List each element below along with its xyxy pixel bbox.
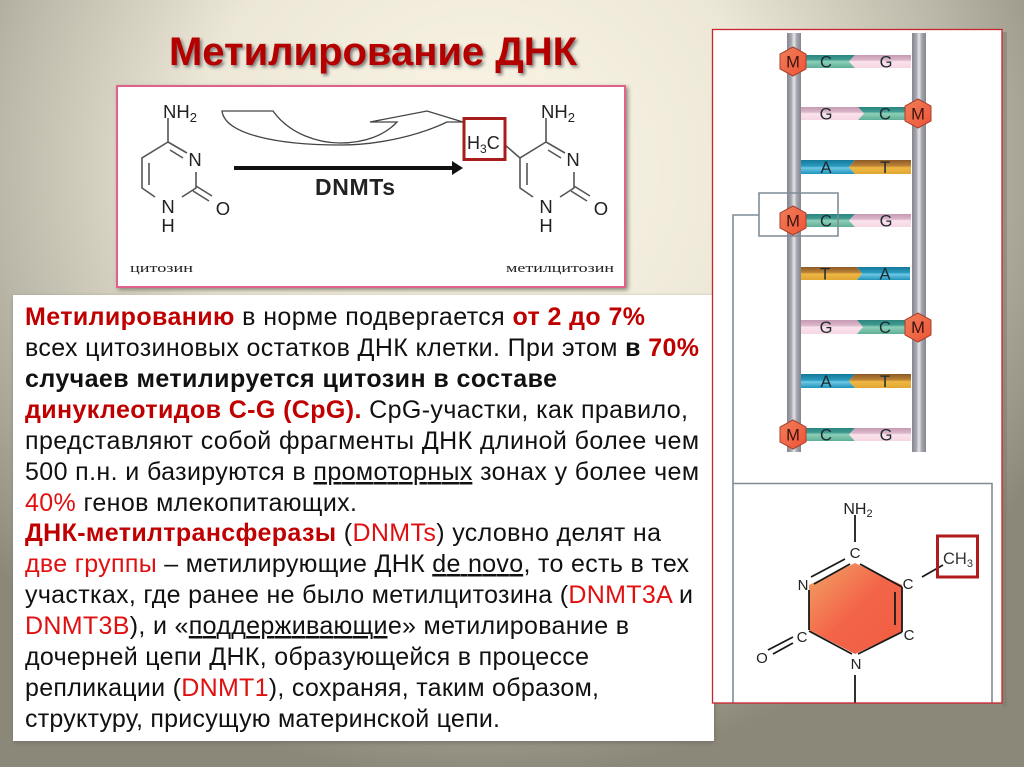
rung 7: A T: A [820, 373, 832, 391]
molecule: methylcytosine detail: N [851, 656, 861, 673]
rung 1: M C G: G [880, 54, 892, 72]
molecule: methylcytosine detail [756, 501, 978, 703]
molecule: methylcytosine: NH [541, 101, 568, 122]
callout: highlight box and leader [733, 193, 992, 703]
ring [809, 563, 902, 654]
rail: left strand [787, 33, 801, 452]
rung 2: G C M: M [911, 106, 925, 124]
rung 5: T A: A [879, 266, 891, 284]
text line 1: Метилированию в норме подвергается от 2 до 7% [25, 303, 645, 331]
molecule: methylcytosine detail: NH [843, 501, 866, 518]
CH3 in red box: 3 [967, 558, 973, 570]
molecule: methylcytosine: O [594, 198, 608, 219]
rung 2: G C M: G [820, 106, 832, 124]
text line 12: дочерней цепи ДНК, образующейся в процессе [25, 643, 589, 671]
molecule: methylcytosine: H [539, 215, 553, 236]
rung 3: A T: A [820, 159, 832, 177]
text line 13: репликации (DNMT1), сохраняя, таким образом, [25, 674, 599, 702]
rung 6: G C M [801, 313, 931, 342]
molecule: methylcytosine: 2 [568, 110, 575, 125]
rung 8: M C G: M [786, 426, 800, 444]
molecule: cytosine: NH [163, 101, 190, 122]
rung 4: M C G [780, 206, 911, 235]
text line 11: DNMT3B), и «поддерживающие» метилирование в [25, 612, 629, 640]
rung 5: T A [801, 266, 910, 284]
text line 5: представляют собой фрагменты ДНК длиной более чем [25, 427, 699, 455]
arrow: methyl transfer curve [222, 111, 463, 145]
molecule: methylcytosine detail: C [904, 627, 915, 644]
label: methylcytosine: метилцитозин [506, 260, 614, 275]
rung 6: G C M: C [879, 319, 891, 337]
molecule: methylcytosine [505, 101, 608, 236]
panel: chemical reaction [117, 86, 625, 287]
rung 2: G C M: C [879, 106, 891, 124]
text line 6: 500 п.н. и базируются в промоторных зонах у более чем [25, 458, 699, 486]
rung 1: M C G: C [820, 54, 832, 72]
molecule: cytosine: 2 [190, 110, 197, 125]
molecule: cytosine: N [161, 196, 175, 217]
rung 4: M C G: C [820, 212, 832, 230]
CH3 in red box: CH [943, 550, 967, 568]
text line 7: 40% генов млекопитающих. [25, 489, 357, 517]
panel border [712, 30, 1002, 703]
rung 7: A T: T [880, 373, 890, 391]
molecule: cytosine [142, 101, 230, 236]
panel: DNA ladder and methylcytosine structure [712, 30, 1007, 707]
molecule: methylcytosine detail: C [797, 629, 808, 646]
molecule: cytosine: N [188, 149, 202, 170]
rung 3: A T: T [880, 159, 890, 177]
rung 5: T A: T [820, 266, 830, 284]
rung 4: M C G: M [786, 212, 800, 230]
text line 4: динуклеотидов C-G (CpG). CpG-участки, как правило, [25, 396, 688, 424]
rung 1: M C G [780, 47, 911, 76]
panel: description text [13, 295, 714, 741]
text line 9: две группы – метилирующие ДНК de novo, то есть в тех [25, 550, 690, 578]
rung 6: G C M: G [820, 319, 832, 337]
molecule: methylcytosine detail: C [903, 576, 914, 593]
label: H3C in red box [464, 118, 505, 160]
arrow: DNMTs reaction [234, 161, 463, 175]
molecule: methylcytosine detail: C [850, 545, 861, 562]
text line 8: ДНК-метилтрансферазы (DNMTs) условно делят на [25, 519, 661, 547]
title: Метилирование ДНК [169, 30, 578, 74]
text line 2: всех цитозиновых остатков ДНК клетки. При этом в 70% [25, 334, 699, 362]
text line 10: участках, где ранее не было метилцитозина (DNMT3A и [25, 581, 693, 609]
label: H3C in red box: H [467, 133, 480, 153]
rung 8: M C G: C [820, 426, 832, 444]
molecule: cytosine: O [216, 198, 230, 219]
text line 14: структуру, присущую материнской цепи. [25, 705, 500, 733]
rung 1: M C G: M [786, 54, 800, 72]
molecule: methylcytosine detail: N [798, 577, 808, 594]
text line 3: случаев метилируется цитозин в составе [25, 365, 557, 393]
rail: right strand [912, 33, 926, 452]
rung 7: A T [801, 373, 911, 391]
CH3 in red box [938, 536, 978, 577]
molecule: methylcytosine detail: O [756, 650, 768, 667]
rung 8: M C G [780, 420, 911, 449]
label: H3C in red box: C [487, 133, 500, 153]
label: cytosine: цитозин [130, 260, 193, 275]
label: H3C in red box: 3 [480, 142, 487, 156]
rung 8: M C G: G [880, 426, 892, 444]
molecule: methylcytosine: N [539, 196, 553, 217]
molecule: methylcytosine: N [566, 149, 580, 170]
rung 4: M C G: G [880, 212, 892, 230]
rung 2: G C M [801, 99, 931, 128]
molecule: cytosine: H [161, 215, 175, 236]
rung 3: A T [801, 159, 911, 177]
rung 6: G C M: M [911, 319, 925, 337]
label: DNMTs: DNMTs [315, 174, 395, 200]
molecule: methylcytosine detail: 2 [866, 508, 873, 520]
